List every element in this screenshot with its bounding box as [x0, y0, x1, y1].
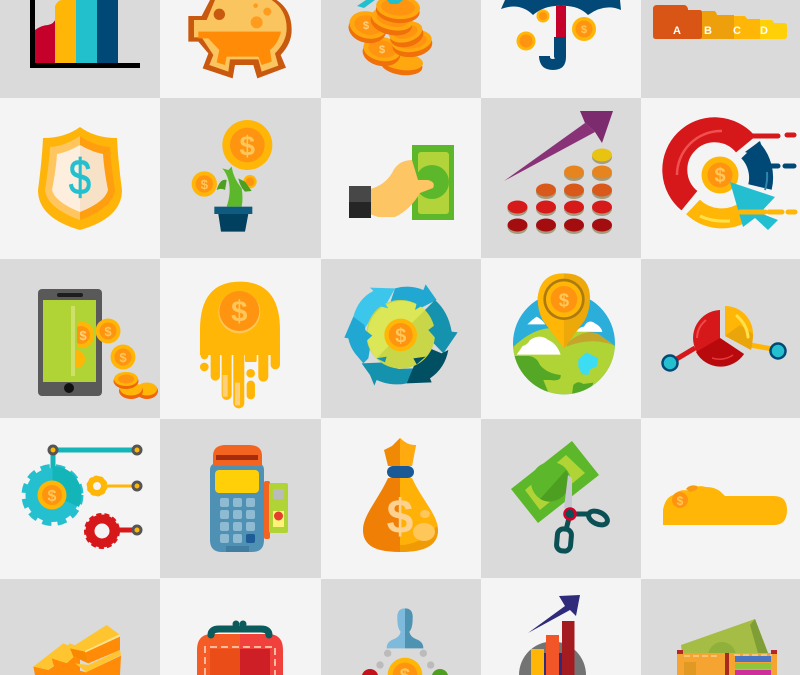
icon: money plant: $	[240, 131, 256, 162]
icon: hand holding banknote	[349, 145, 454, 220]
icon: smartphone with coins: $	[104, 324, 112, 339]
icon: file folders A B C D: C	[733, 25, 741, 37]
icon: exploded pie chart with nodes	[662, 306, 786, 370]
icon: smartphone with coins	[38, 289, 158, 399]
icon: money bag: $	[387, 491, 414, 544]
icon: money plant: $	[201, 177, 209, 192]
icon: gears with connectors: $	[48, 488, 57, 505]
icon: file folders A B C D: A	[673, 25, 681, 37]
icon: file folders A B C D: B	[704, 25, 712, 37]
icon: money bag	[363, 438, 438, 552]
icon: circular arrows with coin	[344, 284, 458, 386]
icon: melting coin	[200, 282, 280, 408]
icon: pile of coins	[346, 0, 434, 78]
icon: banknote and scissors	[511, 441, 610, 552]
icon: growth chart with arrow	[519, 595, 586, 675]
icon: smartphone with coins: $	[79, 328, 87, 343]
icon: umbrella with coins	[501, 0, 621, 70]
icon: pile of coins: $	[379, 44, 385, 56]
icon: dollar shield: $	[69, 149, 91, 205]
icon: gold bars	[33, 625, 121, 675]
icon: pile of coins: $	[363, 20, 369, 32]
icon: umbrella with coins: $	[581, 24, 587, 36]
icon: target donut chart with cursor: $	[714, 165, 726, 187]
icon: money plant	[192, 120, 272, 232]
icon: card payment terminal	[210, 445, 288, 552]
icon: bar chart	[30, 0, 140, 68]
icon: rising arrow over coin stacks	[504, 111, 613, 234]
icon: melting gold coin heap	[663, 485, 787, 525]
icon: gears with connectors	[24, 446, 141, 548]
icon: smartphone with coins: $	[119, 350, 127, 365]
icon: melting coin: $	[231, 296, 247, 329]
icon: globe with location pin: $	[559, 289, 570, 310]
icon: dollar shield	[38, 127, 122, 230]
icon: file folders A B C D	[653, 5, 787, 39]
icon: target donut chart with cursor	[675, 130, 795, 230]
icon: file folders A B C D: D	[760, 25, 768, 37]
icon: circular arrows with coin: $	[395, 325, 406, 347]
icon: globe with location pin	[510, 273, 618, 397]
icon: wallet with banknotes	[677, 619, 777, 675]
icon: person with coin and dots	[362, 608, 448, 675]
icon: coin purse	[197, 620, 283, 675]
icon: piggy bank	[188, 0, 292, 78]
icon: melting gold coin heap: $	[677, 494, 684, 508]
